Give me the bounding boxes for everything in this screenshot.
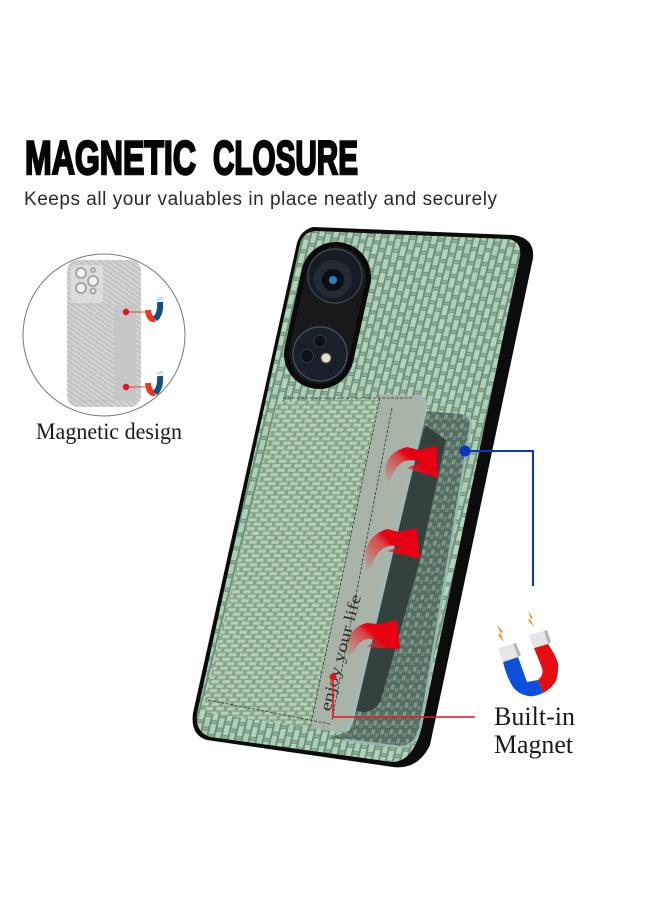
card stitching <box>208 398 412 728</box>
magnet label: Built-in <box>494 702 575 731</box>
upper magnet marker <box>123 298 163 319</box>
rear card rim <box>345 416 471 747</box>
magnet label <box>494 702 575 759</box>
callout: blue leader line <box>460 446 533 586</box>
magnet label: Magnet <box>494 730 574 759</box>
rear card layer <box>330 411 471 747</box>
carbon fibre back <box>197 231 520 762</box>
lower magnet marker <box>123 372 163 393</box>
arrow: bottom <box>347 620 400 658</box>
panel: phone case <box>193 227 533 767</box>
card edge <box>335 396 426 731</box>
card imprint: enjoy your life <box>317 593 365 713</box>
case black bumper <box>193 227 533 767</box>
main lens <box>308 249 362 303</box>
title: MAGNETIC <box>25 131 196 184</box>
grey phone illustration <box>67 260 141 407</box>
arrow: top <box>385 446 438 484</box>
inset caption: Magnetic design <box>36 419 182 444</box>
inset circle <box>23 254 185 416</box>
icon: horseshoe magnet <box>497 611 558 696</box>
panel: magnetic design inset <box>23 254 185 444</box>
callout: red leader line <box>330 674 475 717</box>
dark card slot <box>350 425 446 712</box>
camera island <box>293 249 362 381</box>
subtitle: Keeps all your valuables in place neatly and securely <box>24 189 498 210</box>
card leather strap <box>310 394 425 731</box>
title: CLOSURE <box>213 131 358 184</box>
front card pocket <box>205 396 425 731</box>
secondary lenses and flash <box>293 327 347 381</box>
arrow: middle <box>365 528 420 572</box>
